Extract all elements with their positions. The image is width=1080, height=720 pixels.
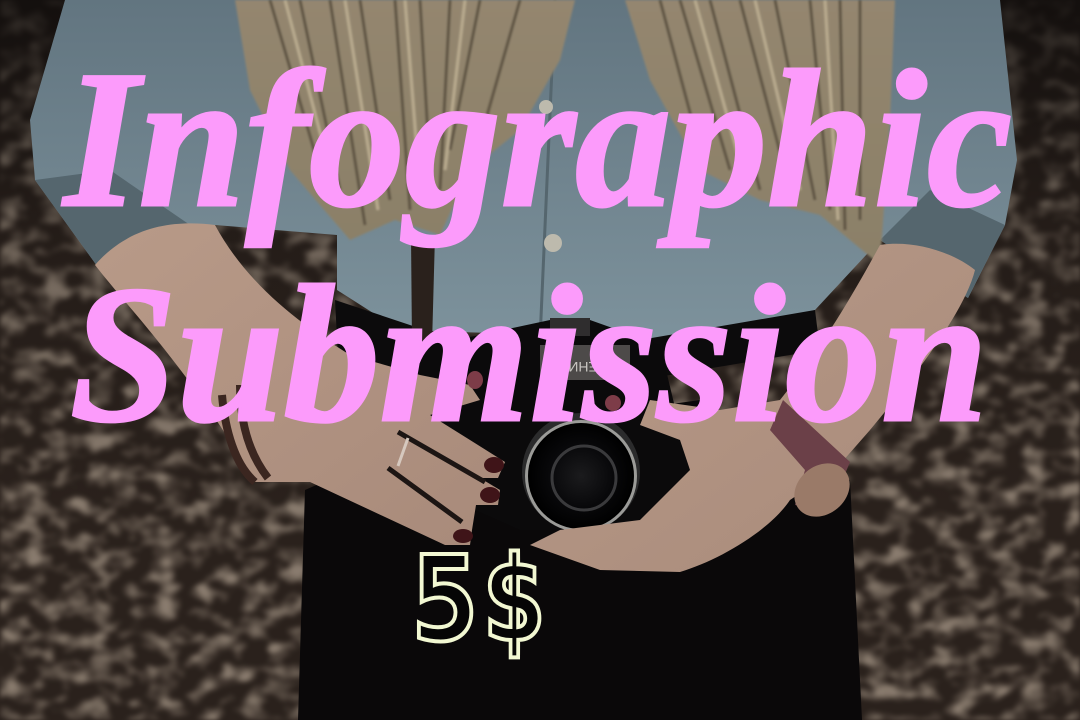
photo: camera lens	[522, 413, 640, 532]
price: 5$	[411, 530, 547, 668]
photo: dark jeans	[298, 400, 862, 720]
price: 5$: $	[481, 530, 547, 668]
photo: nail polish	[453, 371, 621, 543]
photo: right hand and wrist	[530, 244, 975, 572]
title line 2: Submission	[70, 246, 988, 463]
title line 1: Infographic	[62, 31, 1012, 248]
price: 5$: 5	[411, 530, 479, 668]
photo: camera body	[430, 318, 690, 530]
photo: camera body: ЗЕНИТ	[559, 359, 606, 375]
photo: blonde hair	[235, 0, 895, 265]
photo: left forearm and hand	[95, 223, 505, 545]
photo: camera strap	[411, 235, 435, 345]
title: Infographic Submission	[62, 31, 1012, 463]
photo: denim shirt	[30, 0, 1017, 395]
